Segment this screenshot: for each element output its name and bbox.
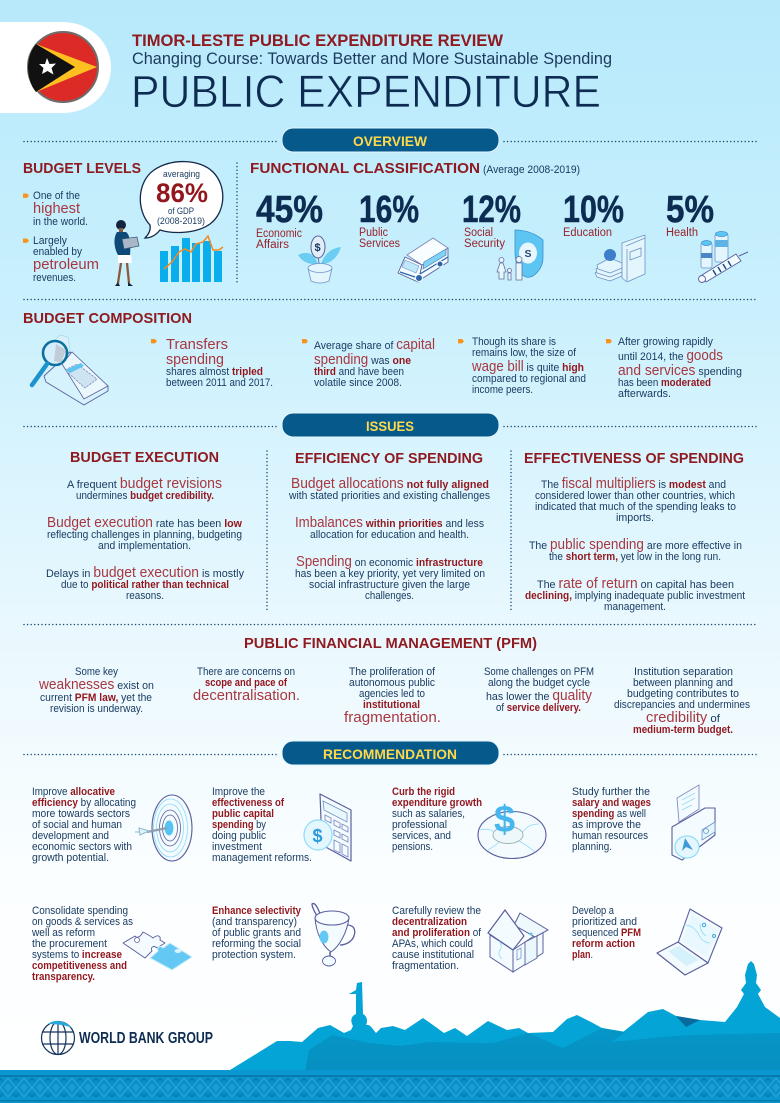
text: wage bill: income peers. — [472, 384, 533, 396]
text: wage bill: Though its share is — [472, 336, 556, 348]
text: fiscal multipliers — [535, 476, 736, 524]
stat: economic affairs: 45% — [256, 189, 323, 231]
text: salary and wages: human resources — [572, 830, 648, 842]
icon: vials and syringe — [698, 232, 748, 282]
text: wage bill — [458, 336, 586, 396]
text: goods and services: until 2014, the goods — [618, 348, 723, 364]
dotted divider — [24, 298, 757, 300]
text: execution delays: reasons. — [126, 590, 164, 602]
text: enhance selectivity: (and transparency) — [212, 916, 297, 928]
header: flag badge — [0, 22, 111, 113]
text: weaknesses — [38, 666, 154, 715]
text: capital spending — [302, 337, 435, 389]
text: execution rate: Budget execution rate has been low — [47, 515, 242, 531]
text: enabled by petroleum — [23, 235, 99, 284]
icon: money plant: $ — [314, 242, 321, 254]
text: enhance selectivity: Enhance selectivity — [212, 905, 302, 917]
stat: economic affairs: Affairs — [256, 239, 289, 251]
panel: budget levels — [23, 160, 223, 286]
text: enabled by petroleum: enabled by — [33, 246, 82, 258]
text: fragmentation: institutional — [363, 699, 420, 711]
text: public capital spending: Improve the — [212, 786, 265, 798]
section banner: issues — [24, 413, 757, 437]
text: infrastructure spending: challenges. — [365, 590, 414, 602]
text: consolidate spending: transparency. — [32, 971, 95, 983]
text: infrastructure spending: has been a key priority, yet very limited on — [295, 568, 485, 580]
text: salary and wages: spending as well — [572, 808, 646, 820]
text: service delivery: along the budget cycle — [488, 677, 590, 689]
panel: functional classification — [250, 160, 748, 283]
section banner: issues: ISSUES — [366, 418, 414, 434]
icon: woman carrying documents — [114, 220, 139, 286]
text: consolidate spending — [31, 905, 133, 983]
stat: education: 10% — [563, 189, 624, 231]
text: decentralization: decentralization — [392, 916, 467, 928]
text: public spending — [529, 537, 742, 563]
text: service delivery: of service delivery. — [496, 702, 581, 714]
text: PFM action plan: sequenced PFM — [572, 927, 641, 939]
text: weaknesses: Some key — [75, 666, 118, 678]
text: allocative efficiency: efficiency by allocating — [32, 797, 136, 809]
text: credibility: medium-term budget. — [633, 724, 733, 736]
text: highest in the world — [23, 190, 88, 228]
text: weaknesses: weaknesses exist on — [38, 677, 154, 693]
text: infrastructure spending: social infrastructure given the large — [309, 579, 470, 591]
text: decentralization: Carefully review the — [392, 905, 481, 917]
text: fiscal multipliers: The fiscal multipliers is modest and — [541, 476, 726, 492]
logo: World Bank Group: WORLD BANK GROUP — [79, 1030, 213, 1047]
footer: landscape with statues — [230, 961, 780, 1072]
text: execution delays: Delays in budget execution is mostly — [46, 565, 244, 581]
text: salary and wages: planning. — [572, 841, 612, 853]
text: decentralization: APAs, which could — [392, 938, 473, 950]
panel: budget composition — [23, 310, 742, 405]
text: rate of return: management. — [604, 601, 666, 613]
icon: books and apple — [595, 235, 645, 282]
text: rate of return: The rate of return on capital has been — [537, 576, 734, 592]
text: goods and services: has been moderated — [618, 377, 711, 389]
icon: dollar in ring — [478, 799, 546, 858]
text: enabled by petroleum: Largely — [33, 235, 67, 247]
footer: patterned textile band — [0, 1070, 780, 1103]
text: enabled by petroleum: petroleum — [33, 257, 99, 273]
stat: education: Education — [563, 227, 612, 239]
text: curb expenditure growth: professional — [392, 819, 447, 831]
icon: puzzle pieces — [123, 932, 192, 970]
text: budget allocations: Budget allocations not fully aligned — [291, 476, 489, 492]
text: consolidate spending: competitiveness and — [32, 960, 127, 972]
text: enhance selectivity — [212, 905, 302, 961]
text: transfers spending: shares almost tripled — [166, 366, 263, 378]
text: PFM action plan: prioritized and — [572, 916, 637, 928]
text: PFM action plan: Develop a — [572, 905, 615, 917]
text: allocative efficiency: more towards sectors — [32, 808, 130, 820]
heading: budget execution: BUDGET EXECUTION — [70, 449, 219, 466]
text: enabled by petroleum: revenues. — [33, 272, 76, 284]
stat: public services — [359, 189, 419, 250]
text: allocative efficiency: development and — [32, 830, 109, 842]
text: infrastructure spending: Spending on economic infrastructure — [296, 554, 483, 570]
text: execution rate — [47, 515, 242, 552]
text: PFM action plan — [572, 905, 641, 961]
text: enhance selectivity: protection system. — [212, 949, 296, 961]
stat: public services: Public — [359, 227, 388, 239]
callout: 86 percent of GDP: of GDP — [168, 206, 194, 217]
text: weaknesses: revision is underway. — [50, 703, 143, 715]
icon: house — [488, 910, 548, 972]
text: decentralisation: There are concerns on — [197, 666, 295, 678]
text: credibility: discrepancies and undermines — [614, 699, 750, 711]
text: decentralisation: scope and pace of — [205, 677, 287, 689]
stat: education — [563, 189, 624, 239]
text: public capital spending: management reforms. — [212, 852, 312, 864]
text: transfers spending: spending — [166, 352, 224, 368]
stat: economic affairs: Economic — [256, 228, 302, 240]
stat: health: 5% — [666, 189, 714, 231]
text: decentralization: cause institutional — [392, 949, 474, 961]
title block: TIMOR-LESTE PUBLIC EXPENDITURE REVIEW — [132, 31, 504, 50]
text: public spending: the short term, yet low in the long run. — [549, 551, 721, 563]
stat: social security: 12% — [462, 189, 521, 231]
text: budget revisions — [67, 476, 222, 502]
text: curb expenditure growth: services, and — [392, 830, 451, 842]
bar chart with trend line — [160, 236, 223, 282]
text: fragmentation: autonomous public — [349, 677, 435, 689]
text: allocative efficiency: economic sectors with — [32, 841, 132, 853]
text: decentralization: and proliferation of — [392, 927, 482, 939]
text: highest in the world: in the world. — [33, 216, 88, 228]
text: public capital spending: doing public — [212, 830, 266, 842]
stat: social security: Social — [464, 227, 493, 239]
text: public capital spending: effectiveness of — [212, 797, 284, 809]
icon: shield and family — [497, 230, 543, 280]
text: curb expenditure growth: pensions. — [392, 841, 433, 853]
panel: efficiency of spending — [288, 450, 490, 602]
note: average period: (Average 2008-2019) — [483, 164, 580, 176]
icon: dollar in ring: $ — [494, 799, 515, 841]
text: salary and wages: Study further the — [572, 786, 650, 798]
text: curb expenditure growth: expenditure growth — [392, 797, 482, 809]
icon: trophy — [312, 904, 355, 966]
text: wage bill: compared to regional and — [472, 373, 586, 385]
text: PFM action plan: plan. — [572, 949, 593, 961]
text: fiscal multipliers: indicated that much of the spending leaks to — [535, 501, 736, 513]
dotted dividers: issues columns — [267, 451, 511, 612]
panel: budget execution — [46, 449, 244, 602]
text: capital spending: spending was one — [314, 352, 411, 368]
text: credibility — [614, 666, 750, 736]
text: rate of return — [525, 576, 746, 613]
heading: effectiveness of spending: EFFECTIVENESS OF SPENDING — [524, 450, 744, 467]
stat: social security — [462, 189, 521, 250]
panel: public financial management — [38, 635, 750, 736]
text: salary and wages: salary and wages — [572, 797, 651, 809]
heading: budget composition: BUDGET COMPOSITION — [23, 310, 192, 327]
text: consolidate spending: Consolidate spending — [32, 905, 128, 917]
text: curb expenditure growth: Curb the rigid — [392, 786, 455, 798]
text: rate of return: declining, implying inadequate public investment — [525, 590, 746, 602]
text: capital spending: Average share of capital — [314, 337, 435, 353]
dotted divider — [24, 624, 757, 626]
text: execution rate: and implementation. — [98, 540, 191, 552]
text: credibility: credibility of — [646, 710, 721, 726]
callout: 86 percent of GDP: (2008-2019) — [157, 216, 205, 227]
text: capital spending: third and have been — [314, 366, 404, 378]
text: decentralization: fragmentation. — [392, 960, 459, 972]
text: transfers spending: Transfers — [166, 337, 228, 353]
icon: target and dart — [135, 795, 192, 861]
text: consolidate spending: systems to increase — [32, 949, 122, 961]
text: curb expenditure growth: such as salaries, — [392, 808, 465, 820]
text: public spending: The public spending are more effective in — [529, 537, 742, 553]
text: fragmentation: agencies led to — [359, 688, 425, 700]
heading: functional classification: FUNCTIONAL CLASSIFICATION — [250, 160, 480, 177]
text: curb expenditure growth — [392, 786, 482, 853]
text: credibility: between planning and — [633, 677, 733, 689]
text: decentralisation — [193, 666, 300, 704]
text: fragmentation: fragmentation. — [344, 710, 441, 726]
text: salary and wages — [572, 786, 651, 853]
text: wage bill: remains low, the size of — [472, 347, 577, 359]
text: public capital spending — [212, 786, 312, 864]
text: weaknesses: current PFM law, yet the — [40, 692, 152, 704]
text: fragmentation: The proliferation of — [349, 666, 436, 678]
text: PFM action plan: reform action — [572, 938, 635, 950]
text: service delivery — [484, 666, 594, 714]
text: enhance selectivity: of public grants and — [212, 927, 301, 939]
logo: World Bank Group — [42, 1021, 213, 1054]
section banner: overview — [24, 128, 757, 152]
text: service delivery: Some challenges on PFM — [484, 666, 594, 678]
text: execution delays — [46, 565, 244, 602]
callout: 86 percent of GDP: averaging — [163, 169, 200, 180]
text: consolidate spending: well as reform — [31, 927, 95, 939]
text: allocative efficiency — [32, 786, 136, 864]
panel: effectiveness of spending — [524, 450, 746, 613]
stat: economic affairs — [256, 189, 323, 251]
text: infrastructure spending — [295, 554, 485, 602]
text: consolidate spending: on goods & services as — [32, 916, 133, 928]
title block — [131, 31, 612, 117]
text: highest in the world: One of the — [33, 190, 80, 202]
section banner: overview: OVERVIEW — [353, 133, 428, 149]
divider: overview columns — [236, 163, 238, 284]
text: public capital spending: spending by — [212, 819, 266, 831]
stat: social security: Security — [464, 238, 505, 250]
text: transfers spending — [151, 337, 273, 389]
text: enhance selectivity: reforming the social — [212, 938, 301, 950]
text: budget revisions: A frequent budget revisions — [67, 476, 222, 492]
icon: shield and family: S — [524, 248, 532, 260]
heading: budget levels: BUDGET LEVELS — [23, 160, 141, 177]
text: imbalances: Imbalances within priorities and less — [295, 515, 484, 531]
text: budget allocations — [288, 476, 490, 502]
icon: bus — [398, 238, 448, 282]
text: budget revisions: undermines budget credibility. — [76, 490, 214, 502]
section banner: recommendation — [24, 741, 757, 765]
title block: PUBLIC EXPENDITURE — [131, 66, 601, 117]
text: salary and wages: as improve the — [572, 819, 641, 831]
heading: PFM: PUBLIC FINANCIAL MANAGEMENT (PFM) — [244, 635, 537, 652]
text: credibility: Institution separation — [634, 666, 733, 678]
icon: calculator and coin: $ — [312, 826, 323, 846]
callout: 86 percent of GDP — [140, 162, 223, 238]
text: highest in the world: highest — [33, 201, 80, 217]
panel: recommendations — [31, 785, 722, 983]
text: execution delays: due to political rather than technical — [61, 579, 229, 591]
icon: wallet and document — [672, 785, 715, 860]
icon: calculator and coin — [304, 794, 351, 861]
text: fiscal multipliers: considered lower than other countries, which — [535, 490, 735, 502]
text: fragmentation — [344, 666, 441, 726]
text: service delivery: has lower the quality — [486, 688, 593, 704]
text: consolidate spending: the procurement — [32, 938, 108, 950]
text: allocative efficiency: growth potential. — [32, 852, 109, 864]
text: budget allocations: with stated priorities and existing challenges — [288, 490, 490, 502]
text: fiscal multipliers: imports. — [616, 512, 654, 524]
text: public capital spending: investment — [212, 841, 263, 853]
text: allocative efficiency: Improve allocative — [32, 786, 115, 798]
icon: laptop — [657, 909, 722, 975]
text: goods and services — [606, 336, 742, 400]
title block: Changing Course: Towards Better and More Sustainable Spending — [132, 50, 612, 68]
text: capital spending: volatile since 2008. — [314, 377, 402, 389]
text: wage bill: wage bill is quite high — [471, 359, 584, 375]
text: public capital spending: public capital — [212, 808, 274, 820]
stat: public services: Services — [359, 238, 400, 250]
text: goods and services: and services spending — [618, 363, 742, 379]
text: goods and services: After growing rapidly — [618, 336, 713, 348]
text: allocative efficiency: of social and human — [32, 819, 122, 831]
section banner: recommendation: RECOMMENDATION — [323, 746, 457, 762]
text: transfers spending: between 2011 and 2017. — [166, 377, 273, 389]
icon: magnifier over card terminal — [32, 335, 108, 405]
stat: public services: 16% — [359, 189, 419, 231]
text: goods and services: afterwards. — [618, 388, 671, 400]
text: decentralization — [392, 905, 482, 972]
text: imbalances — [295, 515, 484, 541]
text: execution rate: reflecting challenges in planning, budgeting — [47, 529, 242, 541]
icon: money plant — [298, 236, 341, 283]
text: credibility: budgeting contributes to — [627, 688, 739, 700]
text: imbalances: allocation for education and health. — [310, 529, 469, 541]
stat: health: Health — [666, 227, 698, 239]
callout: 86 percent of GDP: 86% — [156, 178, 208, 208]
text: decentralisation: decentralisation. — [193, 688, 300, 704]
heading: efficiency of spending: EFFICIENCY OF SPENDING — [295, 450, 483, 467]
